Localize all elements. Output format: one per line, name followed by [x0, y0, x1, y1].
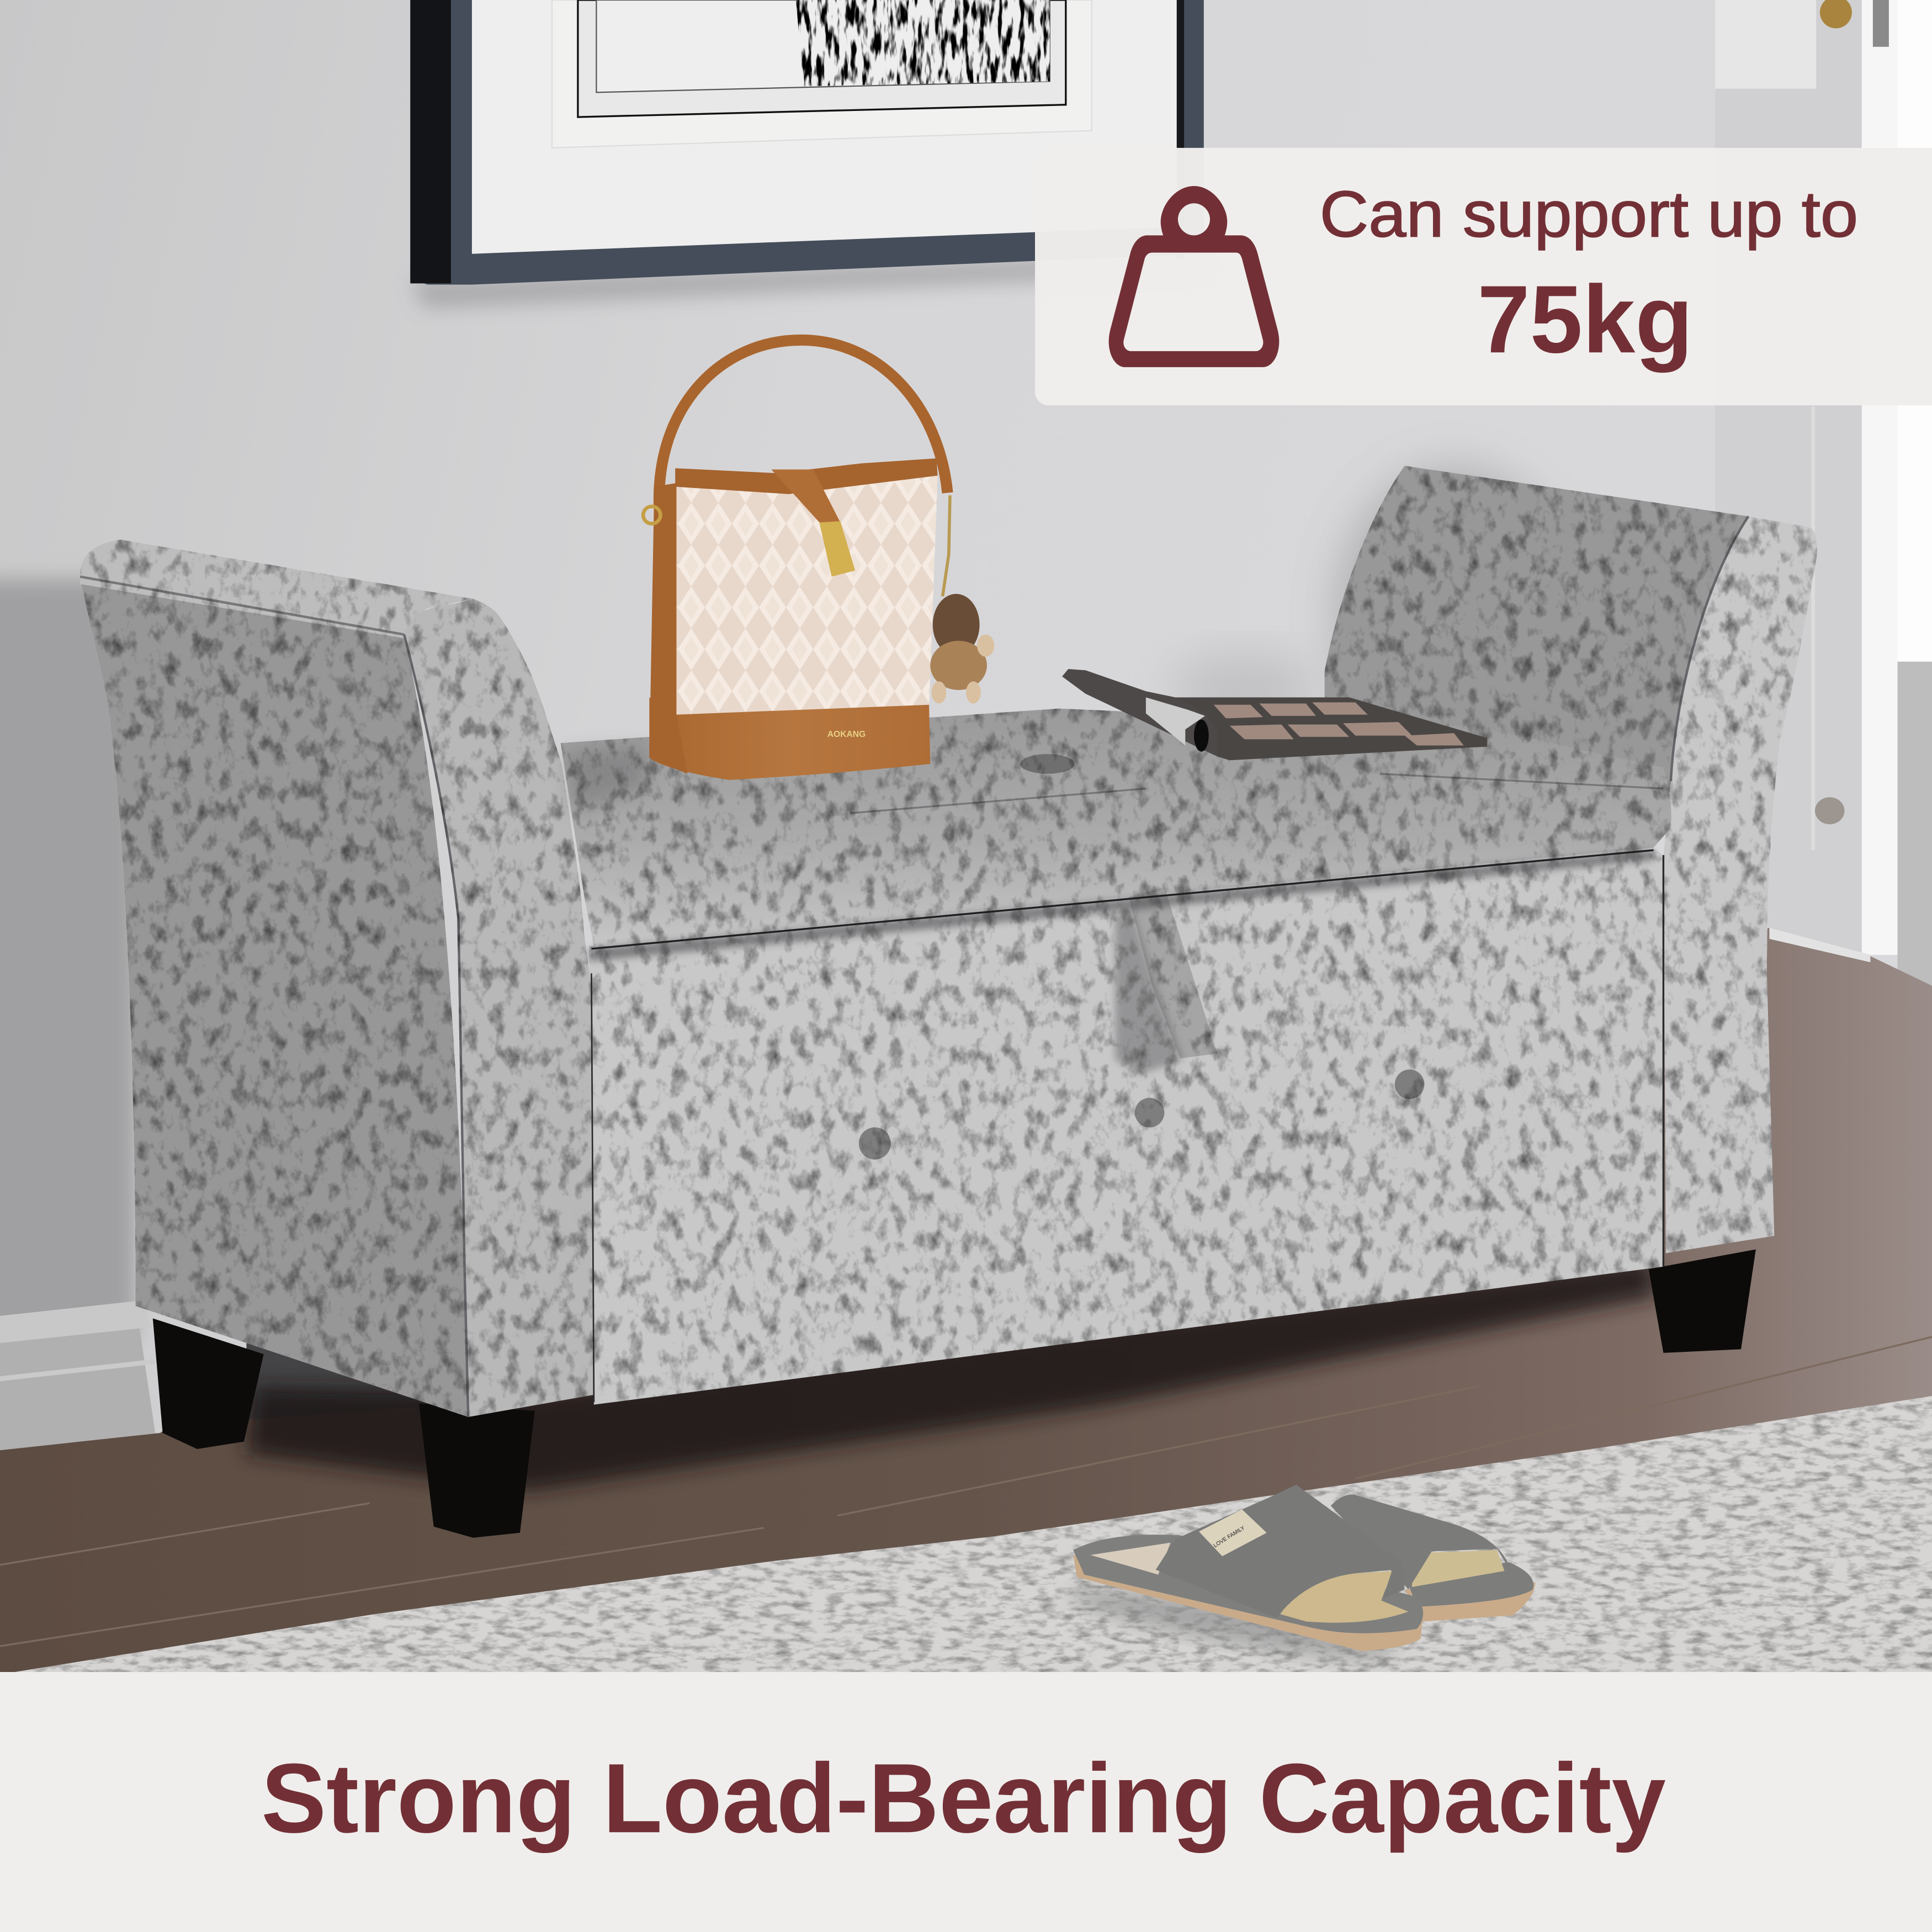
right slipper [1331, 1494, 1535, 1622]
slipper label [1199, 1509, 1267, 1556]
callout panel [1035, 148, 1932, 405]
bag: cream quilted body [675, 476, 938, 717]
bag: handle [659, 340, 948, 508]
artwork: leopard sketch [796, 0, 1050, 86]
bench: left arm front panel [404, 599, 594, 1417]
bag: ring [643, 506, 660, 524]
bottom title band [0, 1672, 1932, 1932]
bag: keychain charm [930, 495, 994, 704]
icon: weight [1109, 186, 1279, 367]
bag: front strap [771, 469, 840, 522]
rug [15, 1396, 1932, 1676]
slipper label: LOVE FAMILY [1213, 1525, 1246, 1549]
floor shadow [246, 1257, 1657, 1491]
bench: pull strap [1129, 887, 1217, 1058]
wall under left arm [246, 1337, 419, 1419]
bench: storage box front [589, 848, 1663, 1405]
callout text: Can support up to: Can support up to [1320, 178, 1858, 251]
bag: tan base [649, 697, 930, 780]
bench: left arm top band [80, 540, 473, 638]
magazine [1062, 669, 1487, 760]
bag: rim [675, 458, 938, 494]
bench: seat cushion [561, 708, 1671, 946]
callout text: 75kg: 75kg [1477, 265, 1693, 373]
slippers [1065, 1485, 1535, 1671]
bench shading [567, 747, 1663, 1402]
bench: right arm front panel [1663, 516, 1817, 1253]
bench: left arm back panel [80, 579, 468, 1417]
bench: right arm back panel [1325, 466, 1748, 813]
handbag [643, 340, 994, 780]
bag: logo: AOKANG [827, 730, 866, 739]
framed picture [410, 0, 1204, 308]
bench legs [153, 1249, 1756, 1538]
title: Strong Load-Bearing Capacity [261, 1743, 1666, 1853]
bag: gold clasp [819, 521, 855, 577]
door knob [1815, 797, 1845, 824]
left slipper [1073, 1485, 1423, 1651]
inner mat lines [552, 0, 1092, 148]
bench: box buttons [859, 1070, 1424, 1159]
bag: side strap [649, 483, 688, 774]
storage bench [80, 466, 1817, 1417]
